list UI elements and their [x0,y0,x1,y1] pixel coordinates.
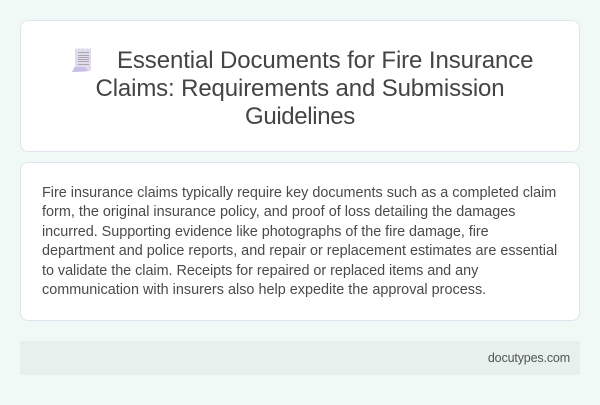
footer source text: docutypes.com [488,351,570,365]
title: Claims: Requirements and Submission [96,75,504,102]
text block: description: form, the original insurance policy, and proof of loss detailing the damages [42,204,515,220]
text block: description: to validate the claim. Receipts for repaired or replaced items and any [42,262,478,278]
text block: description: communication with insurers also help expedite the approval process. [42,282,486,298]
panel: title card [20,20,580,152]
panel: description card [20,162,580,321]
title: Guidelines [245,103,355,130]
text block: description: department and police reports, and repair or replacement estimates are essential [42,243,557,259]
text block: description: incurred. Supporting evidence like photographs of the fire damage, fire [42,224,489,240]
title: Essential Documents for Fire Insurance [117,47,533,74]
title [96,47,533,130]
footer bar [20,341,580,375]
icon: document receipt [72,48,91,72]
text block: description [42,184,557,298]
text block: description: Fire insurance claims typically require key documents such as a completed claim [42,184,556,200]
